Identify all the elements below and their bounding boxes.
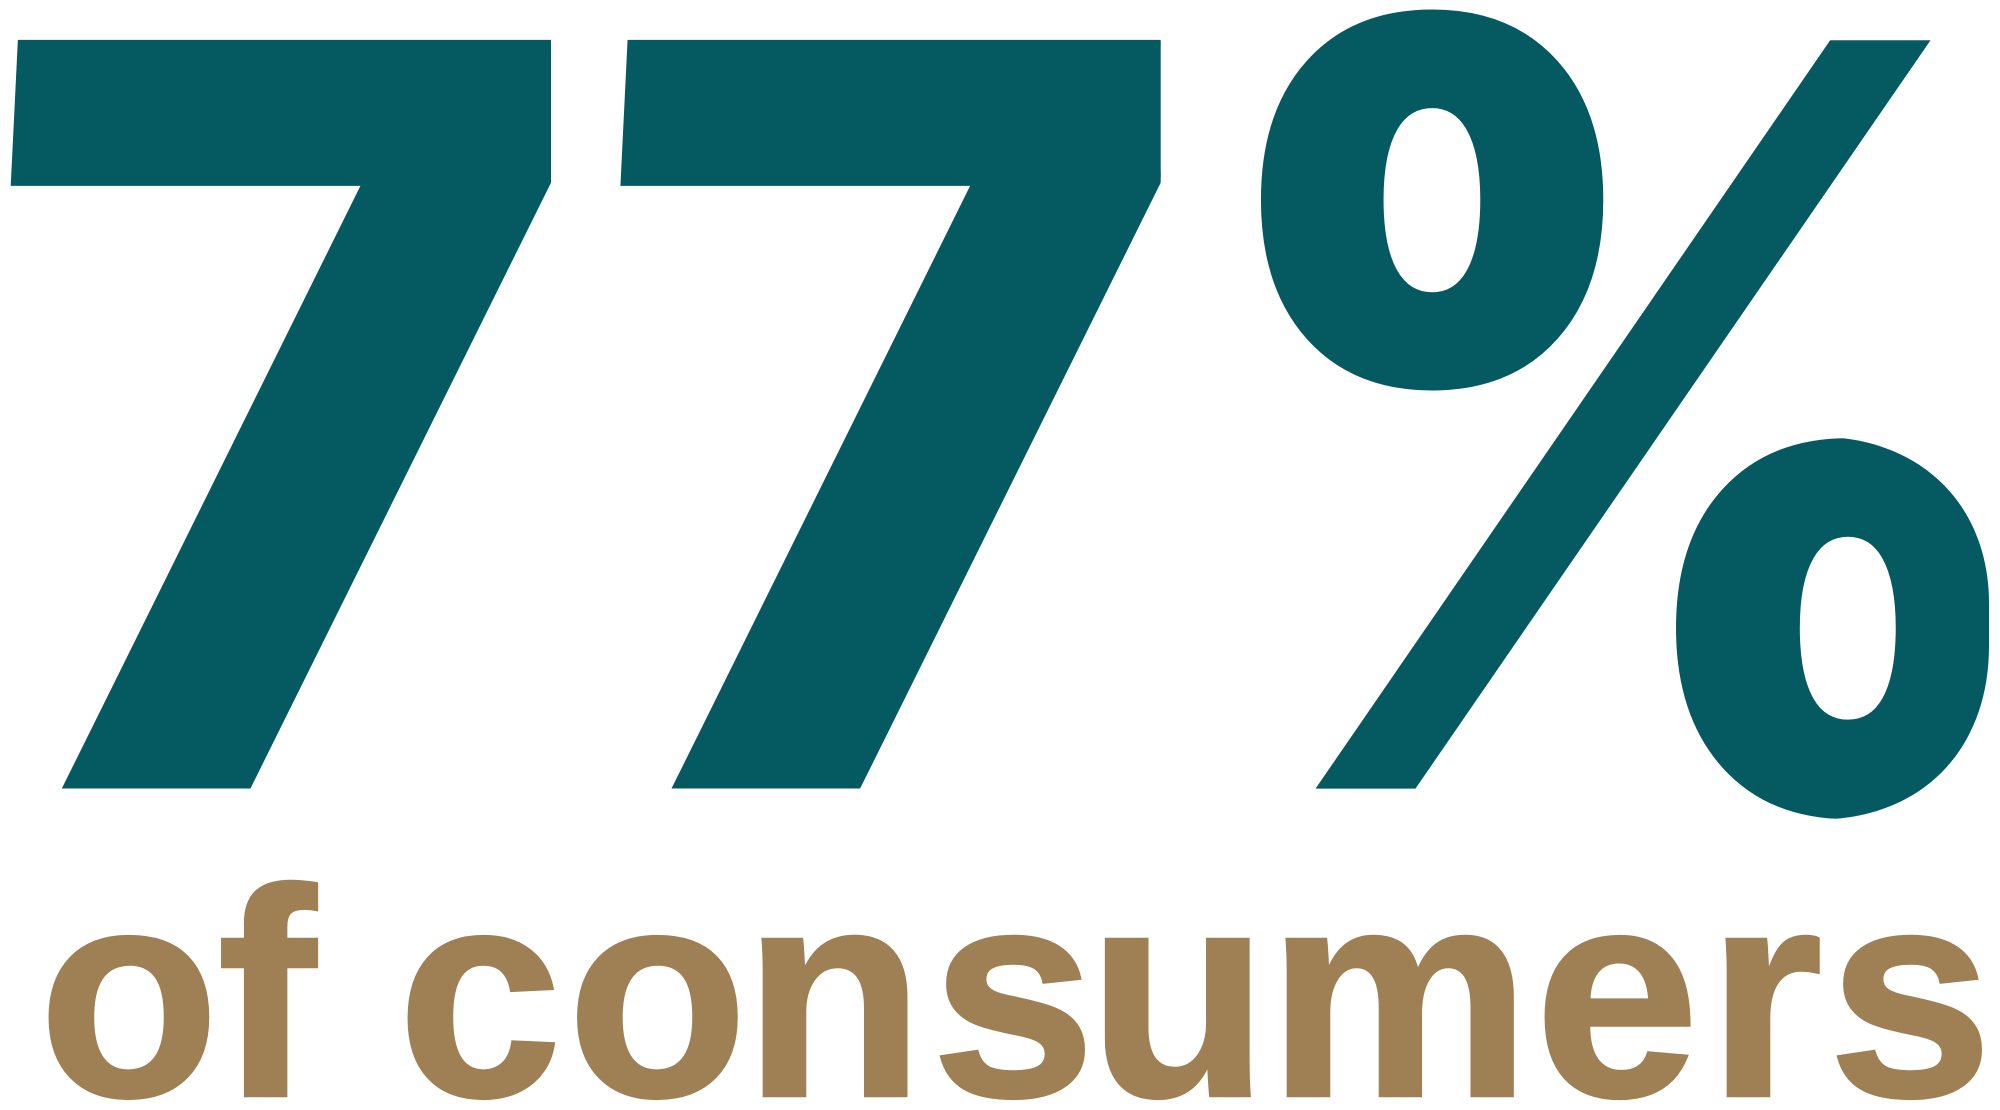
percent sign bbox=[1260, 10, 1989, 819]
